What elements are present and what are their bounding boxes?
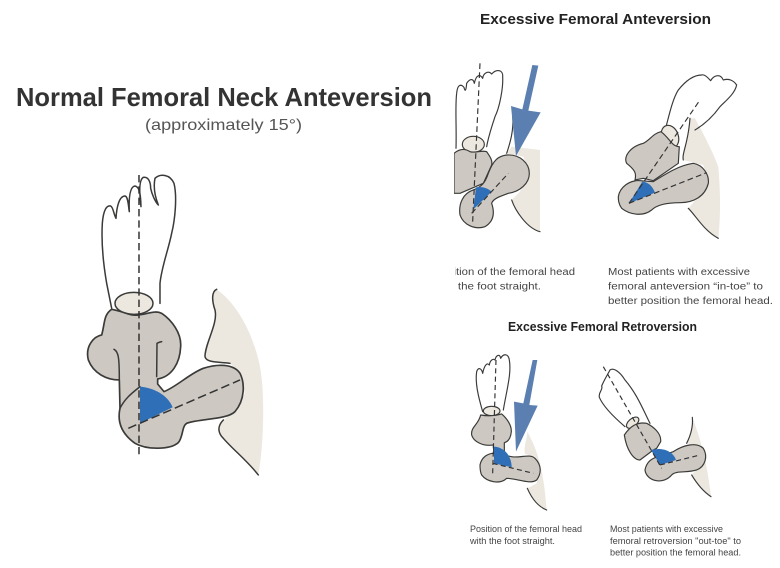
caption: anteversion in-toe <box>608 267 773 307</box>
arrow: anteversion force <box>511 65 541 156</box>
caption: retroversion out-toe: Most patients with excessive <box>610 524 723 534</box>
diagram: anteversion, in-toe <box>618 75 737 238</box>
caption: retroversion foot straight <box>469 524 582 546</box>
caption: anteversion foot straight: with the foot straight. <box>433 282 541 292</box>
diagram: retroversion, foot straight <box>472 355 547 510</box>
heading: excessive femoral anteversion: Excessive Femoral Anteversion <box>480 11 711 28</box>
caption: anteversion in-toe: Most patients with excessive <box>608 267 750 278</box>
heading: excessive femoral retroversion: Excessive Femoral Retroversion <box>508 320 697 334</box>
diagram: normal anteversion <box>88 175 263 475</box>
diagram: anteversion, foot straight <box>454 63 540 232</box>
caption: anteversion foot straight: Position of the femoral head <box>434 267 575 278</box>
caption: retroversion out-toe <box>610 524 741 558</box>
diagram: retroversion, out-toe <box>599 367 711 497</box>
subtitle: approximately 15 degrees: (approximately 15°) <box>145 117 302 134</box>
caption: anteversion in-toe: femoral anteversion “in-toe” to <box>608 282 763 292</box>
arrow: retroversion force <box>514 360 538 452</box>
title: normal femoral neck anteversion: Normal Femoral Neck Anteversion <box>16 82 432 112</box>
caption: retroversion out-toe: better position the femoral head. <box>610 548 741 558</box>
caption: retroversion foot straight: with the foot straight. <box>469 536 555 546</box>
caption: retroversion foot straight: Position of the femoral head <box>470 524 582 534</box>
caption: retroversion out-toe: femoral retroversion "out-toe" to <box>610 536 741 546</box>
caption: anteversion in-toe: better position the femoral head. <box>608 296 773 307</box>
caption: anteversion foot straight <box>455 268 574 292</box>
